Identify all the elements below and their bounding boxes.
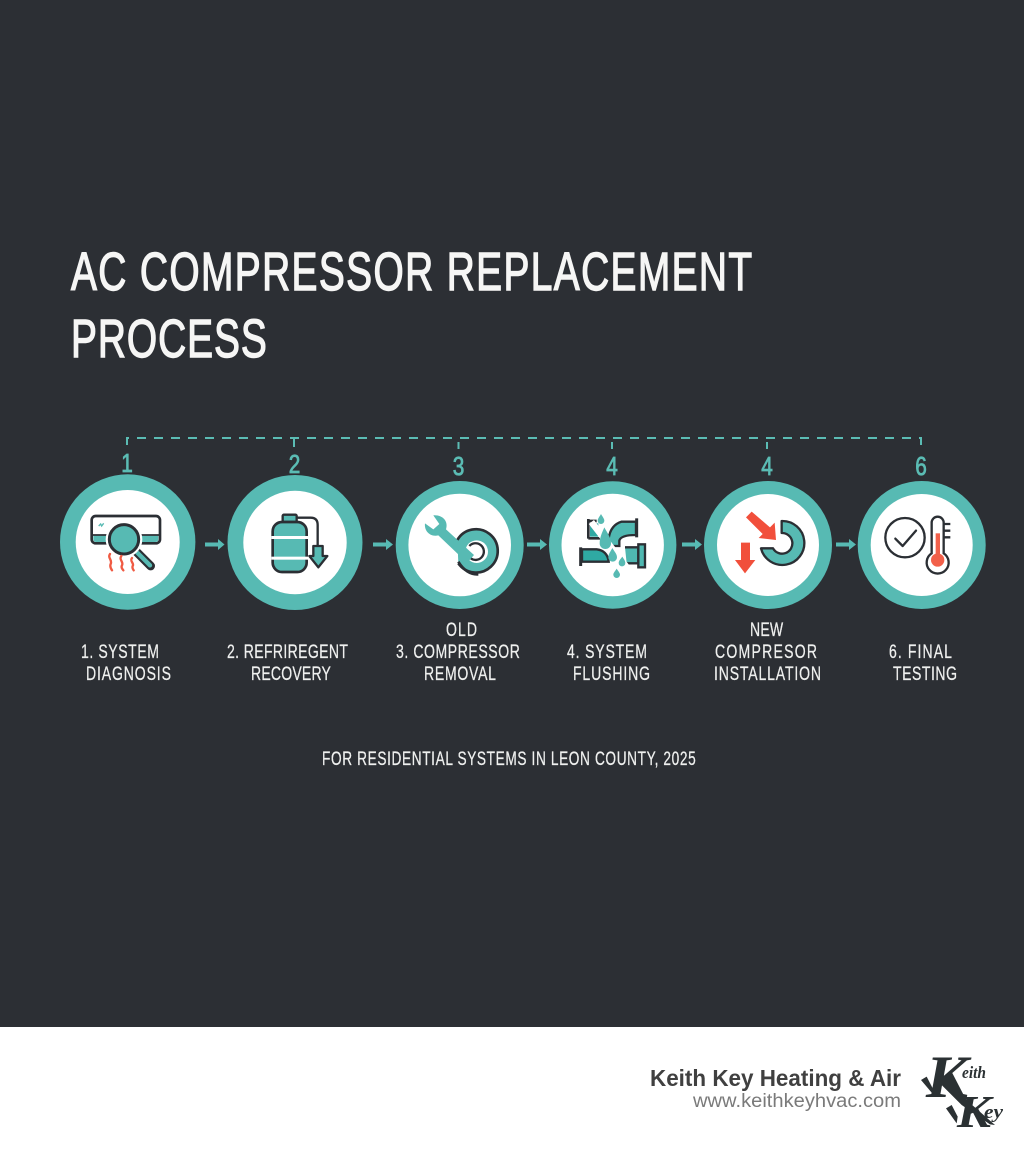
- logo: K: [925, 1044, 972, 1110]
- label: step 2: RECOVERY: [251, 663, 331, 685]
- logo: ey: [984, 1102, 1004, 1123]
- arrow 5 to 6: [836, 539, 856, 550]
- white footer band: [0, 1027, 1024, 1154]
- step numbers: 4: [606, 452, 618, 481]
- arrow 4 to 5: [682, 539, 702, 550]
- label: step 3: OLD: [446, 619, 477, 641]
- label: step 6: 6. FINAL: [889, 641, 952, 663]
- label: step 4: FLUSHING: [573, 663, 650, 685]
- label: step 5: COMPRESOR: [715, 641, 817, 663]
- dashed connector bracket: [127, 438, 921, 449]
- brand name and website: [650, 1065, 901, 1112]
- label: step 3: 3. COMPRESSOR: [396, 641, 520, 663]
- label: step 1: 1. SYSTEM: [81, 641, 159, 663]
- label: step 1: [81, 641, 171, 685]
- logo: K: [956, 1086, 995, 1137]
- step numbers: 1: [121, 449, 133, 478]
- label: step 4: [567, 641, 650, 685]
- logo: [921, 1044, 1004, 1137]
- brand name and website: www.keithkeyhvac.com: [692, 1091, 901, 1112]
- arrow 3 to 4: [527, 539, 547, 550]
- label: step 3: [396, 619, 520, 685]
- label: step 5: INSTALLATION: [714, 663, 821, 685]
- step numbers: 6: [915, 452, 927, 481]
- step 1 circle: system diagnosis icon: [60, 474, 195, 610]
- arrow 2 to 3: [373, 539, 393, 550]
- label: step 2: 2. REFRIREGENT: [227, 641, 348, 663]
- title: AC COMPRESSOR REPLACEMENT: [71, 241, 752, 301]
- footnote: FOR RESIDENTIAL SYSTEMS IN LEON COUNTY, 2025: [322, 748, 696, 770]
- step 2 circle: refrigerant recovery icon: [228, 475, 362, 610]
- label: step 6: [889, 641, 957, 685]
- step 3 circle: old compressor removal icon: [396, 481, 524, 609]
- step numbers: 4: [761, 452, 773, 481]
- label: step 5: [714, 619, 821, 685]
- step numbers: 2: [289, 450, 300, 479]
- logo: eith: [962, 1063, 986, 1082]
- step numbers: 3: [453, 452, 464, 481]
- label: step 5: NEW: [750, 619, 783, 641]
- label: step 1: DIAGNOSIS: [86, 663, 171, 685]
- title: [71, 241, 752, 368]
- brand name and website: Keith Key Heating & Air: [650, 1065, 901, 1091]
- label: step 2: [227, 641, 348, 685]
- step 4 circle: system flushing icon: [549, 481, 676, 609]
- step 5 circle: new compressor installation icon: [704, 481, 832, 609]
- step numbers: [121, 449, 927, 481]
- step 6 circle: final testing icon: [858, 481, 986, 609]
- label: step 6: TESTING: [893, 663, 957, 685]
- label: step 4: 4. SYSTEM: [567, 641, 647, 663]
- title: PROCESS: [71, 308, 267, 368]
- label: step 3: REMOVAL: [424, 663, 496, 685]
- arrow 1 to 2: [205, 539, 224, 550]
